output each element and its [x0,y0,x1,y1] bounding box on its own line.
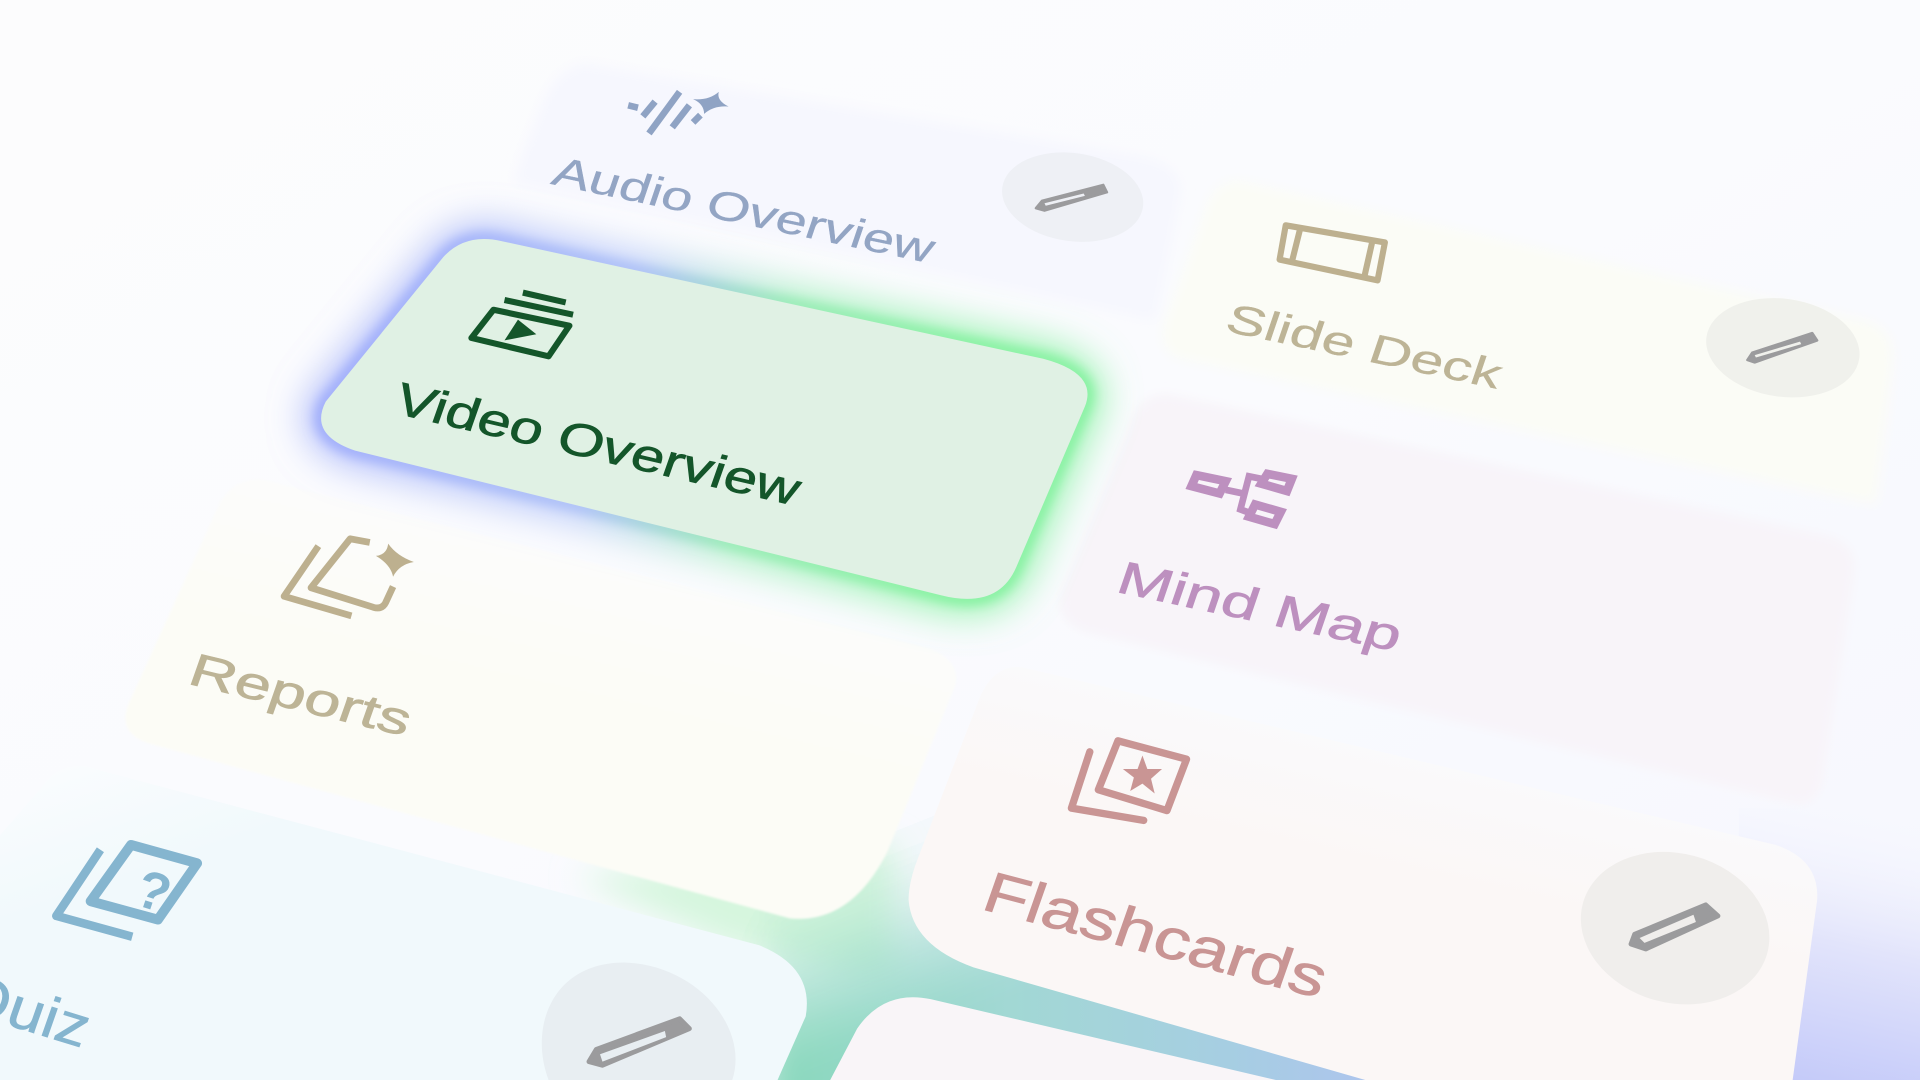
card background [321,239,1088,599]
card background [0,766,807,1080]
panel: cropped bottom card [830,997,1276,1080]
lavender corner glow [1739,808,1920,1080]
button: edit [1700,289,1866,407]
icon: video stack with play [471,293,573,356]
icon: slide deck [1280,225,1385,280]
card background [909,667,1817,1080]
icon: mind map [1191,474,1292,524]
label: reports: Reports [183,644,419,746]
icon: audio waves with sparkle [628,92,729,133]
icon: reports with sparkle [284,539,414,616]
label: mind map: Mind Map [1111,552,1409,661]
panel: reports [126,480,956,919]
panel: audio overview [514,64,1181,321]
icon: quiz question card [56,845,197,937]
panel: slide deck [1163,181,1893,504]
panel: video overview (highlighted) [321,239,1088,599]
panel: quiz [0,766,807,1080]
panel: flashcards [909,667,1817,1080]
label: slide deck: Slide Deck [1220,295,1509,397]
button: edit [996,144,1149,251]
inner glow [321,239,1088,599]
icon: quiz question card: ? [128,859,178,925]
button: edit [542,962,736,1080]
button: edit [1564,831,1787,1025]
label: audio overview: Audio Overview [547,148,943,272]
outer soft glow [321,239,1088,599]
green and blue gradient gap between cards [592,834,1365,1080]
icon: flashcards with star [1071,741,1187,820]
label: video overview: Video Overview [389,373,808,515]
panel: mind map [1060,394,1855,804]
card background [1060,394,1855,804]
card background [1163,181,1893,504]
card background [514,64,1181,321]
label: flashcards: Flashcards [975,861,1336,1010]
card background [126,480,956,919]
